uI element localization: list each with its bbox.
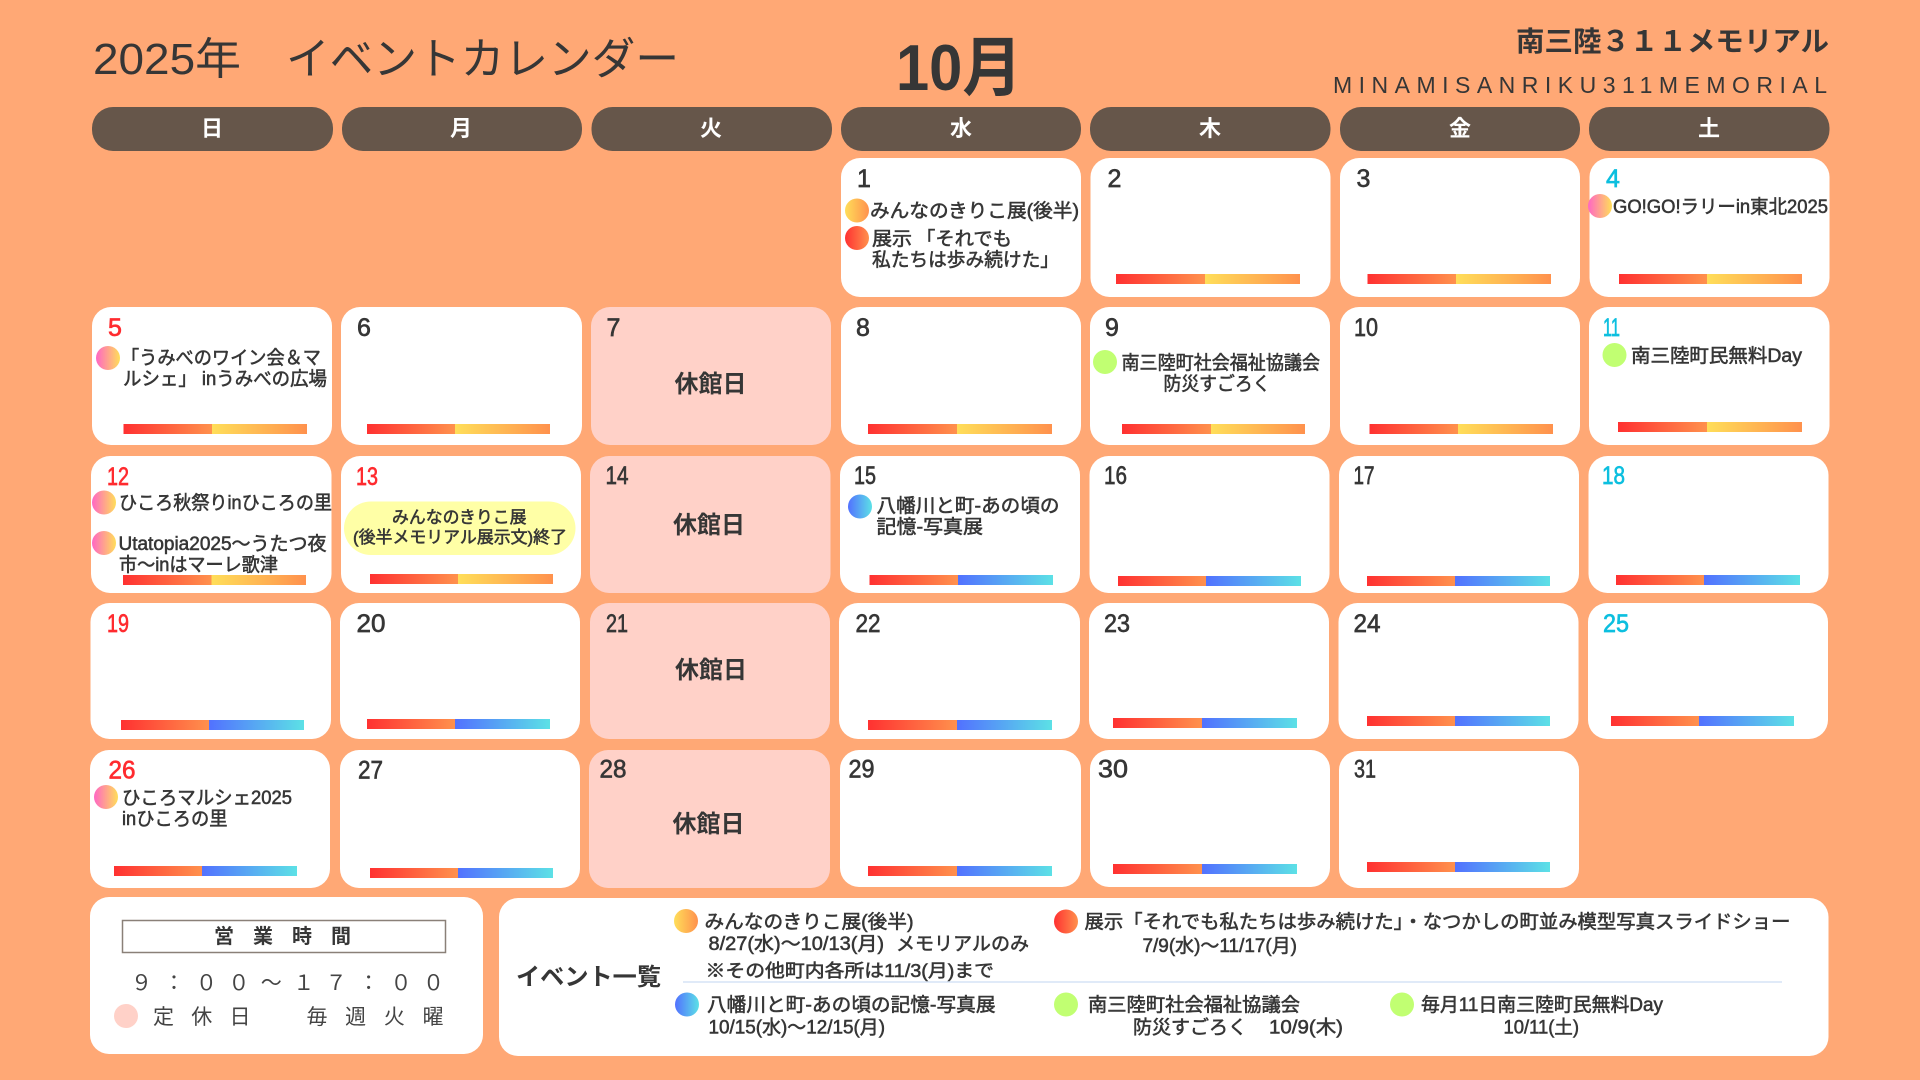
cell: October 18 (1588, 456, 1828, 593)
title: 2025年 (93, 35, 241, 84)
cell: October 5: 5 (108, 314, 122, 342)
panel: opening hours (90, 897, 483, 1054)
cell: October 27: 27 (358, 756, 383, 784)
cell: October 17 (1339, 456, 1579, 593)
cell: October 18: 18 (1602, 462, 1625, 490)
cell: October 30: 30 (1098, 756, 1128, 784)
event text: exhibition: 展示 (872, 229, 912, 250)
cell: October 31: 31 (1354, 756, 1376, 784)
event text: Hikoro marche: inひころの里 (122, 809, 228, 830)
cell: October 22 (839, 603, 1080, 739)
cell: October 5 (92, 307, 332, 445)
month heading: 10月 (896, 31, 1022, 104)
icon: closed day swatch (114, 1004, 138, 1028)
event text: Hikoro marche: ひころマルシェ2025 (122, 788, 292, 809)
event item: welfare council (1054, 992, 1343, 1038)
event text: Yahatagawa photo exhibition: 八幡川と町-あの頃の (876, 495, 1060, 517)
event item: welfare council: 南三陸町社会福祉協議会 (1088, 994, 1300, 1016)
event item: Yahatagawa photo exhibition: 10/15(水)～12/15(月) (708, 1016, 885, 1038)
event text: Hikoro marche (122, 788, 292, 830)
event item: free day (1390, 992, 1663, 1038)
event text: wine party (121, 347, 327, 390)
cell: October 28 closed: 28 (600, 756, 626, 784)
event item: exhibition and slideshow (1054, 910, 1790, 957)
event icon: Yahatagawa photo exhibition (848, 494, 872, 518)
cell: October 20 (340, 603, 580, 739)
weekday header: 土 (1698, 116, 1720, 141)
event text: exhibition: 私たちは歩み続けた」 (872, 249, 1059, 271)
cell: October 3 (1340, 158, 1580, 297)
cell: October 22: 22 (856, 610, 880, 638)
cell: October 2: 2 (1108, 165, 1121, 193)
cell: October 25 (1588, 603, 1828, 739)
event icon: Hikoro marche (94, 785, 118, 809)
event item: exhibition and slideshow: 展示「それでも私たちは歩み続けた」・なつかしの町並み模型写真スライドショー (1084, 911, 1790, 933)
cell: October 7 closed: 7 (606, 314, 620, 342)
cell: October 31 (1339, 751, 1579, 888)
cell: October 20: 20 (356, 610, 386, 638)
cell: October 1 (841, 158, 1081, 297)
opening hours heading: 営 業 時 間 (214, 925, 351, 948)
title (93, 35, 679, 84)
cell: October 15: 15 (854, 462, 876, 490)
organisation name in latin letters: MINAMISANRIKU311MEMORIAL (1333, 72, 1827, 98)
callout: kiriko exhibition ends: みんなのきりこ展 (392, 508, 526, 527)
cell: October 30 (1090, 750, 1330, 887)
event item: welfare council: 10/9(木) (1269, 1016, 1343, 1038)
cell: October 24 (1338, 603, 1578, 739)
cell: October 23 (1089, 603, 1329, 739)
event text: Utatopia (118, 533, 326, 576)
panel: event list (499, 898, 1828, 1056)
cell: October 29 (840, 750, 1081, 887)
event text: Utatopia: 市～inはマーレ歌津 (119, 554, 278, 576)
opening hours heading (122, 920, 446, 952)
cell: October 21 closed: 21 (606, 610, 628, 638)
closed day value: 毎 週 火 曜 (306, 1006, 444, 1029)
cell: October 17: 17 (1354, 462, 1374, 490)
cell: October 13: 13 (356, 463, 378, 491)
event icon: welfare council (1093, 350, 1117, 374)
event item: kiriko exhibition (674, 909, 1029, 981)
event icon: Utatopia (92, 531, 116, 555)
event item: kiriko exhibition: メモリアルのみ (896, 934, 1029, 955)
cell: October 23: 23 (1104, 610, 1130, 638)
event item: kiriko exhibition: 8/27(水)～10/13(月) (708, 933, 884, 955)
weekday header: 木 (1199, 116, 1221, 141)
event icon: free day (1602, 343, 1626, 367)
cell: October 8: 8 (856, 314, 870, 342)
event text: rally: GO!GO!ラリーin東北2025 (1613, 196, 1828, 218)
weekday header: 水 (950, 116, 972, 141)
weekday header: 月 (450, 116, 472, 141)
event item: exhibition and slideshow: 7/9(水)～11/17(月) (1142, 935, 1297, 957)
callout: kiriko exhibition ends: (後半メモリアル展示文)終了 (353, 528, 567, 547)
cell: October 12: 12 (107, 463, 129, 491)
cell: October 19: 19 (107, 610, 129, 638)
cell: October 10: 10 (1354, 314, 1378, 342)
cell: October 11: 11 (1603, 314, 1620, 342)
cell: October 8 (841, 307, 1081, 445)
event item: welfare council: 防災すごろく (1133, 1016, 1247, 1038)
cell: October 4 (1588, 158, 1830, 297)
cell: October 1: 1 (857, 165, 871, 193)
opening hours time: ９：００～１７：００ (131, 972, 444, 995)
cell: October 7 closed (591, 307, 831, 445)
closed day label: 定 休 日 (153, 1006, 250, 1029)
event item: Yahatagawa photo exhibition: 八幡川と町-あの頃の記憶-写真展 (707, 994, 996, 1016)
weekday header: 火 (700, 116, 722, 141)
title: イベントカレンダー (286, 35, 679, 84)
cell: October 27 (340, 750, 580, 888)
cell: October 13 (341, 456, 581, 593)
cell: October 2 (1090, 158, 1330, 297)
cell: October 4: 4 (1606, 165, 1620, 193)
cell: October 28 closed (589, 750, 830, 888)
event text: exhibition (872, 228, 1059, 271)
cell: October 7 closed: 休館日 (674, 371, 746, 398)
cell: October 28 closed: 休館日 (672, 811, 744, 838)
cell: October 14 closed (590, 456, 830, 593)
cell: October 12 (91, 456, 332, 593)
event item: kiriko exhibition: みんなのきりこ展(後半) (704, 911, 914, 933)
cell: October 15 (840, 456, 1080, 593)
cell: October 21 closed (590, 603, 830, 739)
event text: welfare council: 南三陸町社会福祉協議会 (1122, 352, 1320, 374)
event item: free day: 10/11(土) (1504, 1016, 1579, 1038)
event item: Yahatagawa photo exhibition (675, 992, 996, 1038)
cell: October 24: 24 (1354, 610, 1381, 638)
event list heading: イベント一覧 (516, 964, 661, 991)
weekday header: 日 (201, 116, 223, 141)
cell: October 14 closed: 休館日 (673, 512, 745, 539)
cell: October 10 (1340, 307, 1580, 445)
organisation name: 南三陸３１１メモリアル (1516, 26, 1829, 57)
cell: October 26 (90, 750, 330, 888)
event icon: kiriko exhibition (845, 198, 869, 222)
cell: October 9 (1090, 307, 1330, 445)
event text: wine party: 「うみべのワイン会＆マ (121, 347, 321, 369)
event text: Yahatagawa photo exhibition (876, 495, 1060, 538)
cell: October 6: 6 (357, 314, 371, 342)
cell: October 21 closed: 休館日 (675, 657, 747, 684)
event text: exhibition: 「それでも (916, 228, 1012, 250)
event text: welfare council: 防災すごろく (1164, 373, 1270, 395)
event text: welfare council (1122, 352, 1320, 395)
callout: kiriko exhibition ends (344, 502, 576, 555)
cell: October 11 (1589, 307, 1830, 445)
event item: kiriko exhibition: ※その他町内各所は11/3(月)まで (706, 961, 994, 981)
event text: free day: 南三陸町民無料Day (1631, 345, 1803, 367)
cell: October 29: 29 (848, 756, 874, 784)
event text: Utatopia: Utatopia2025～うたつ夜 (118, 533, 326, 555)
cell: October 16 (1090, 456, 1330, 593)
cell: October 3: 3 (1356, 165, 1370, 193)
weekday header: 金 (1449, 116, 1471, 141)
weekday header (92, 107, 1830, 151)
event text: kiriko exhibition: みんなのきりこ展(後半) (870, 200, 1079, 222)
cell: October 26: 26 (108, 756, 136, 784)
cell: October 9: 9 (1105, 314, 1119, 342)
event text: wine party: ルシェ」 inうみべの広場 (123, 368, 327, 390)
cell: October 25: 25 (1603, 610, 1629, 638)
event icon: wine party (96, 346, 120, 370)
cell: October 6 (341, 307, 582, 445)
cell: October 19 (90, 603, 331, 739)
event icon: rally (1588, 194, 1612, 218)
event icon: exhibition (845, 226, 869, 250)
cell: October 14 closed: 14 (606, 462, 629, 490)
cell: October 16: 16 (1104, 462, 1127, 490)
event text: autumn festival: ひころ秋祭りinひころの里 (119, 492, 332, 514)
event icon: autumn festival (92, 490, 116, 514)
event text: Yahatagawa photo exhibition: 記憶-写真展 (876, 516, 983, 538)
event item: free day: 毎月11日南三陸町民無料Day (1421, 994, 1663, 1016)
